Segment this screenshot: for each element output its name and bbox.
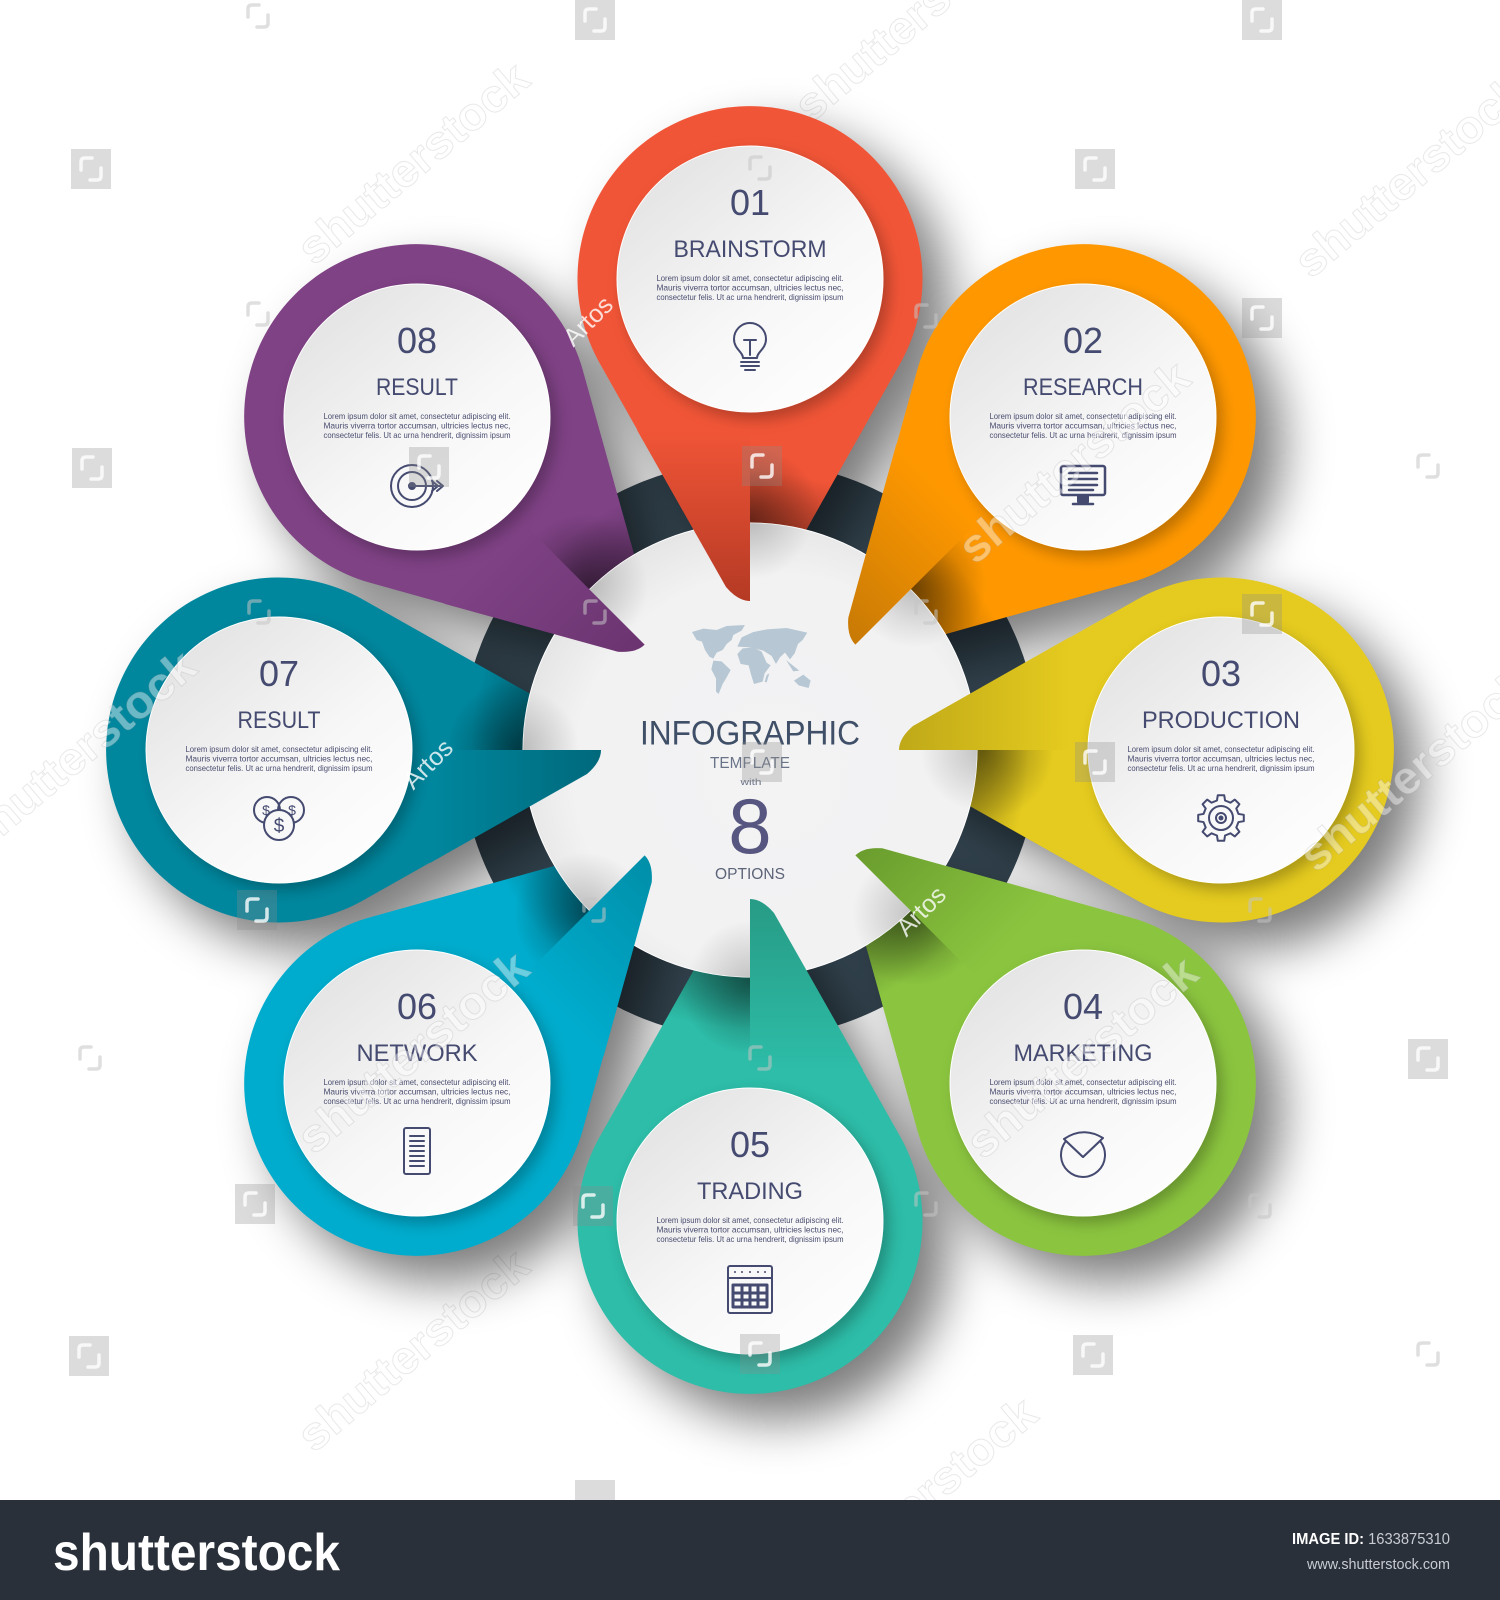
watermark author labels: Artos xyxy=(558,291,619,352)
watermark text over artwork: shutterstock xyxy=(287,940,539,1163)
icon: gear xyxy=(1198,795,1244,841)
panel: 03 production: 03 xyxy=(1201,653,1241,694)
pin body 04 green xyxy=(866,866,1256,1256)
icon: document xyxy=(404,1128,430,1174)
panel: 07 result: consectetur felis. Ut ac urna hendrerit, dignissim ipsum xyxy=(186,763,373,773)
panel: 08 result xyxy=(284,284,550,550)
center title: 8 xyxy=(728,782,772,870)
icon: world map xyxy=(692,625,811,694)
panel: 04 marketing xyxy=(950,950,1216,1216)
panel: 05 trading: 05 xyxy=(730,1124,770,1165)
panel: 02 research xyxy=(950,284,1216,550)
panel: 06 network: Lorem ipsum dolor sit amet, consectetur adipiscing elit. xyxy=(324,1077,510,1087)
pin body 07 dark teal xyxy=(106,578,530,922)
icon: calendar xyxy=(728,1266,772,1313)
panel: 04 marketing: Lorem ipsum dolor sit amet, consectetur adipiscing elit. xyxy=(990,1077,1176,1087)
panel: 03 production xyxy=(1088,617,1354,883)
icon: light bulb xyxy=(734,323,766,370)
icon: target with arrow xyxy=(391,465,443,507)
panel: 02 research: 02 xyxy=(1063,320,1103,361)
watermark author labels xyxy=(398,291,952,942)
panel: 03 production: PRODUCTION xyxy=(1142,707,1300,734)
panel: 07 result xyxy=(146,617,412,883)
panel: 06 network: consectetur felis. Ut ac urna hendrerit, dignissim ipsum xyxy=(324,1096,511,1106)
watermark author labels: Artos xyxy=(891,881,952,942)
panel: 02 research: consectetur felis. Ut ac urna hendrerit, dignissim ipsum xyxy=(990,430,1177,440)
panel: 04 marketing: Mauris viverra tortor accumsan, ultricies lectus nec, xyxy=(990,1086,1176,1096)
icon: coins xyxy=(254,797,304,840)
panel: 01 brainstorm: Lorem ipsum dolor sit amet, consectetur adipiscing elit. xyxy=(656,273,844,283)
panel: 08 result: Lorem ipsum dolor sit amet, consectetur adipiscing elit. xyxy=(324,411,510,421)
pin body 03 yellow xyxy=(970,578,1394,922)
icon: coins: $ xyxy=(274,816,285,837)
panel: 03 production: Lorem ipsum dolor sit amet, consectetur adipiscing elit. xyxy=(1128,744,1314,754)
footer bar xyxy=(0,1500,1500,1600)
panel: 08 result: RESULT xyxy=(376,374,458,401)
panel: 03 production: Mauris viverra tortor accumsan, ultricies lectus nec, xyxy=(1128,754,1314,764)
panel: 04 marketing: MARKETING xyxy=(1014,1040,1152,1067)
center title: INFOGRAPHIC xyxy=(640,714,860,752)
panel: 01 brainstorm xyxy=(617,146,883,412)
panel: 05 trading: Lorem ipsum dolor sit amet, consectetur adipiscing elit. xyxy=(656,1215,844,1225)
icon: coins: $ xyxy=(262,802,270,818)
icon: coins: $ xyxy=(288,802,296,818)
icon: monitor xyxy=(1061,466,1105,504)
center title: with xyxy=(739,777,762,787)
watermark marks xyxy=(79,9,1438,1367)
watermark author labels: Artos xyxy=(398,734,459,795)
panel: 01 brainstorm: Mauris viverra tortor accumsan, ultricies lectus nec, xyxy=(656,282,844,292)
center title: OPTIONS xyxy=(715,866,785,883)
panel: 05 trading: TRADING xyxy=(697,1178,803,1205)
pin body 01 red xyxy=(578,106,922,530)
panel: 01 brainstorm: 01 xyxy=(730,182,770,223)
footer logo: shutterstock xyxy=(53,1524,340,1582)
watermark text over artwork: shutterstock xyxy=(948,350,1200,573)
panel: 01 brainstorm: consectetur felis. Ut ac urna hendrerit, dignissim ipsum xyxy=(656,292,844,302)
watermark text on background: shutterstock xyxy=(287,51,539,274)
panel: 06 network xyxy=(284,950,550,1216)
panel: 04 marketing: consectetur felis. Ut ac urna hendrerit, dignissim ipsum xyxy=(990,1096,1177,1106)
watermark text over artwork: shutterstock xyxy=(956,945,1208,1168)
pin tails folded over the disc xyxy=(430,430,1070,1070)
pin body 02 orange xyxy=(866,244,1256,634)
panel: 07 result: 07 xyxy=(259,653,299,694)
watermark outlines xyxy=(80,5,1438,1365)
center title xyxy=(640,714,860,883)
panel: 06 network: Mauris viverra tortor accumsan, ultricies lectus nec, xyxy=(324,1086,510,1096)
pin body 08 purple xyxy=(244,244,634,634)
central dark ring xyxy=(492,492,1008,1008)
panel: 08 result: consectetur felis. Ut ac urna hendrerit, dignissim ipsum xyxy=(324,430,511,440)
icon: pie chart xyxy=(1061,1132,1105,1177)
panel: 07 result: Mauris viverra tortor accumsan, ultricies lectus nec, xyxy=(186,754,372,764)
watermark text on background: shutterstock xyxy=(287,1238,539,1461)
panel: 06 network: 06 xyxy=(397,986,437,1027)
panel: 08 result: 08 xyxy=(397,320,437,361)
panel: 01 brainstorm: BRAINSTORM xyxy=(674,236,826,263)
panel: 02 research: Lorem ipsum dolor sit amet, consectetur adipiscing elit. xyxy=(990,411,1176,421)
footer image id: IMAGE ID: 1633875310 xyxy=(1292,1531,1450,1548)
footer url: www.shutterstock.com xyxy=(1306,1556,1450,1573)
pin shadows xyxy=(132,132,1420,1420)
pin bodies xyxy=(106,106,1394,1394)
panel: 03 production: consectetur felis. Ut ac urna hendrerit, dignissim ipsum xyxy=(1128,763,1315,773)
panel: 07 result: Lorem ipsum dolor sit amet, consectetur adipiscing elit. xyxy=(186,744,372,754)
pin body 05 teal xyxy=(578,970,922,1394)
panel: 07 result: RESULT xyxy=(238,707,321,734)
panel: 02 research: RESEARCH xyxy=(1023,374,1143,401)
panel: 04 marketing: 04 xyxy=(1063,986,1103,1027)
panel: 02 research: Mauris viverra tortor accumsan, ultricies lectus nec, xyxy=(990,420,1176,430)
pin body 06 blue xyxy=(244,866,634,1256)
central disc xyxy=(523,523,977,977)
panel: 05 trading: consectetur felis. Ut ac urna hendrerit, dignissim ipsum xyxy=(656,1234,844,1244)
panel: 05 trading xyxy=(617,1088,883,1354)
watermark text over artwork xyxy=(0,350,1500,1168)
panel: 05 trading: Mauris viverra tortor accumsan, ultricies lectus nec, xyxy=(656,1224,844,1234)
center title: TEMPLATE xyxy=(710,755,790,772)
panel: 06 network: NETWORK xyxy=(356,1040,478,1067)
panel: 08 result: Mauris viverra tortor accumsan, ultricies lectus nec, xyxy=(324,420,510,430)
tail shadows on disc xyxy=(515,515,985,985)
